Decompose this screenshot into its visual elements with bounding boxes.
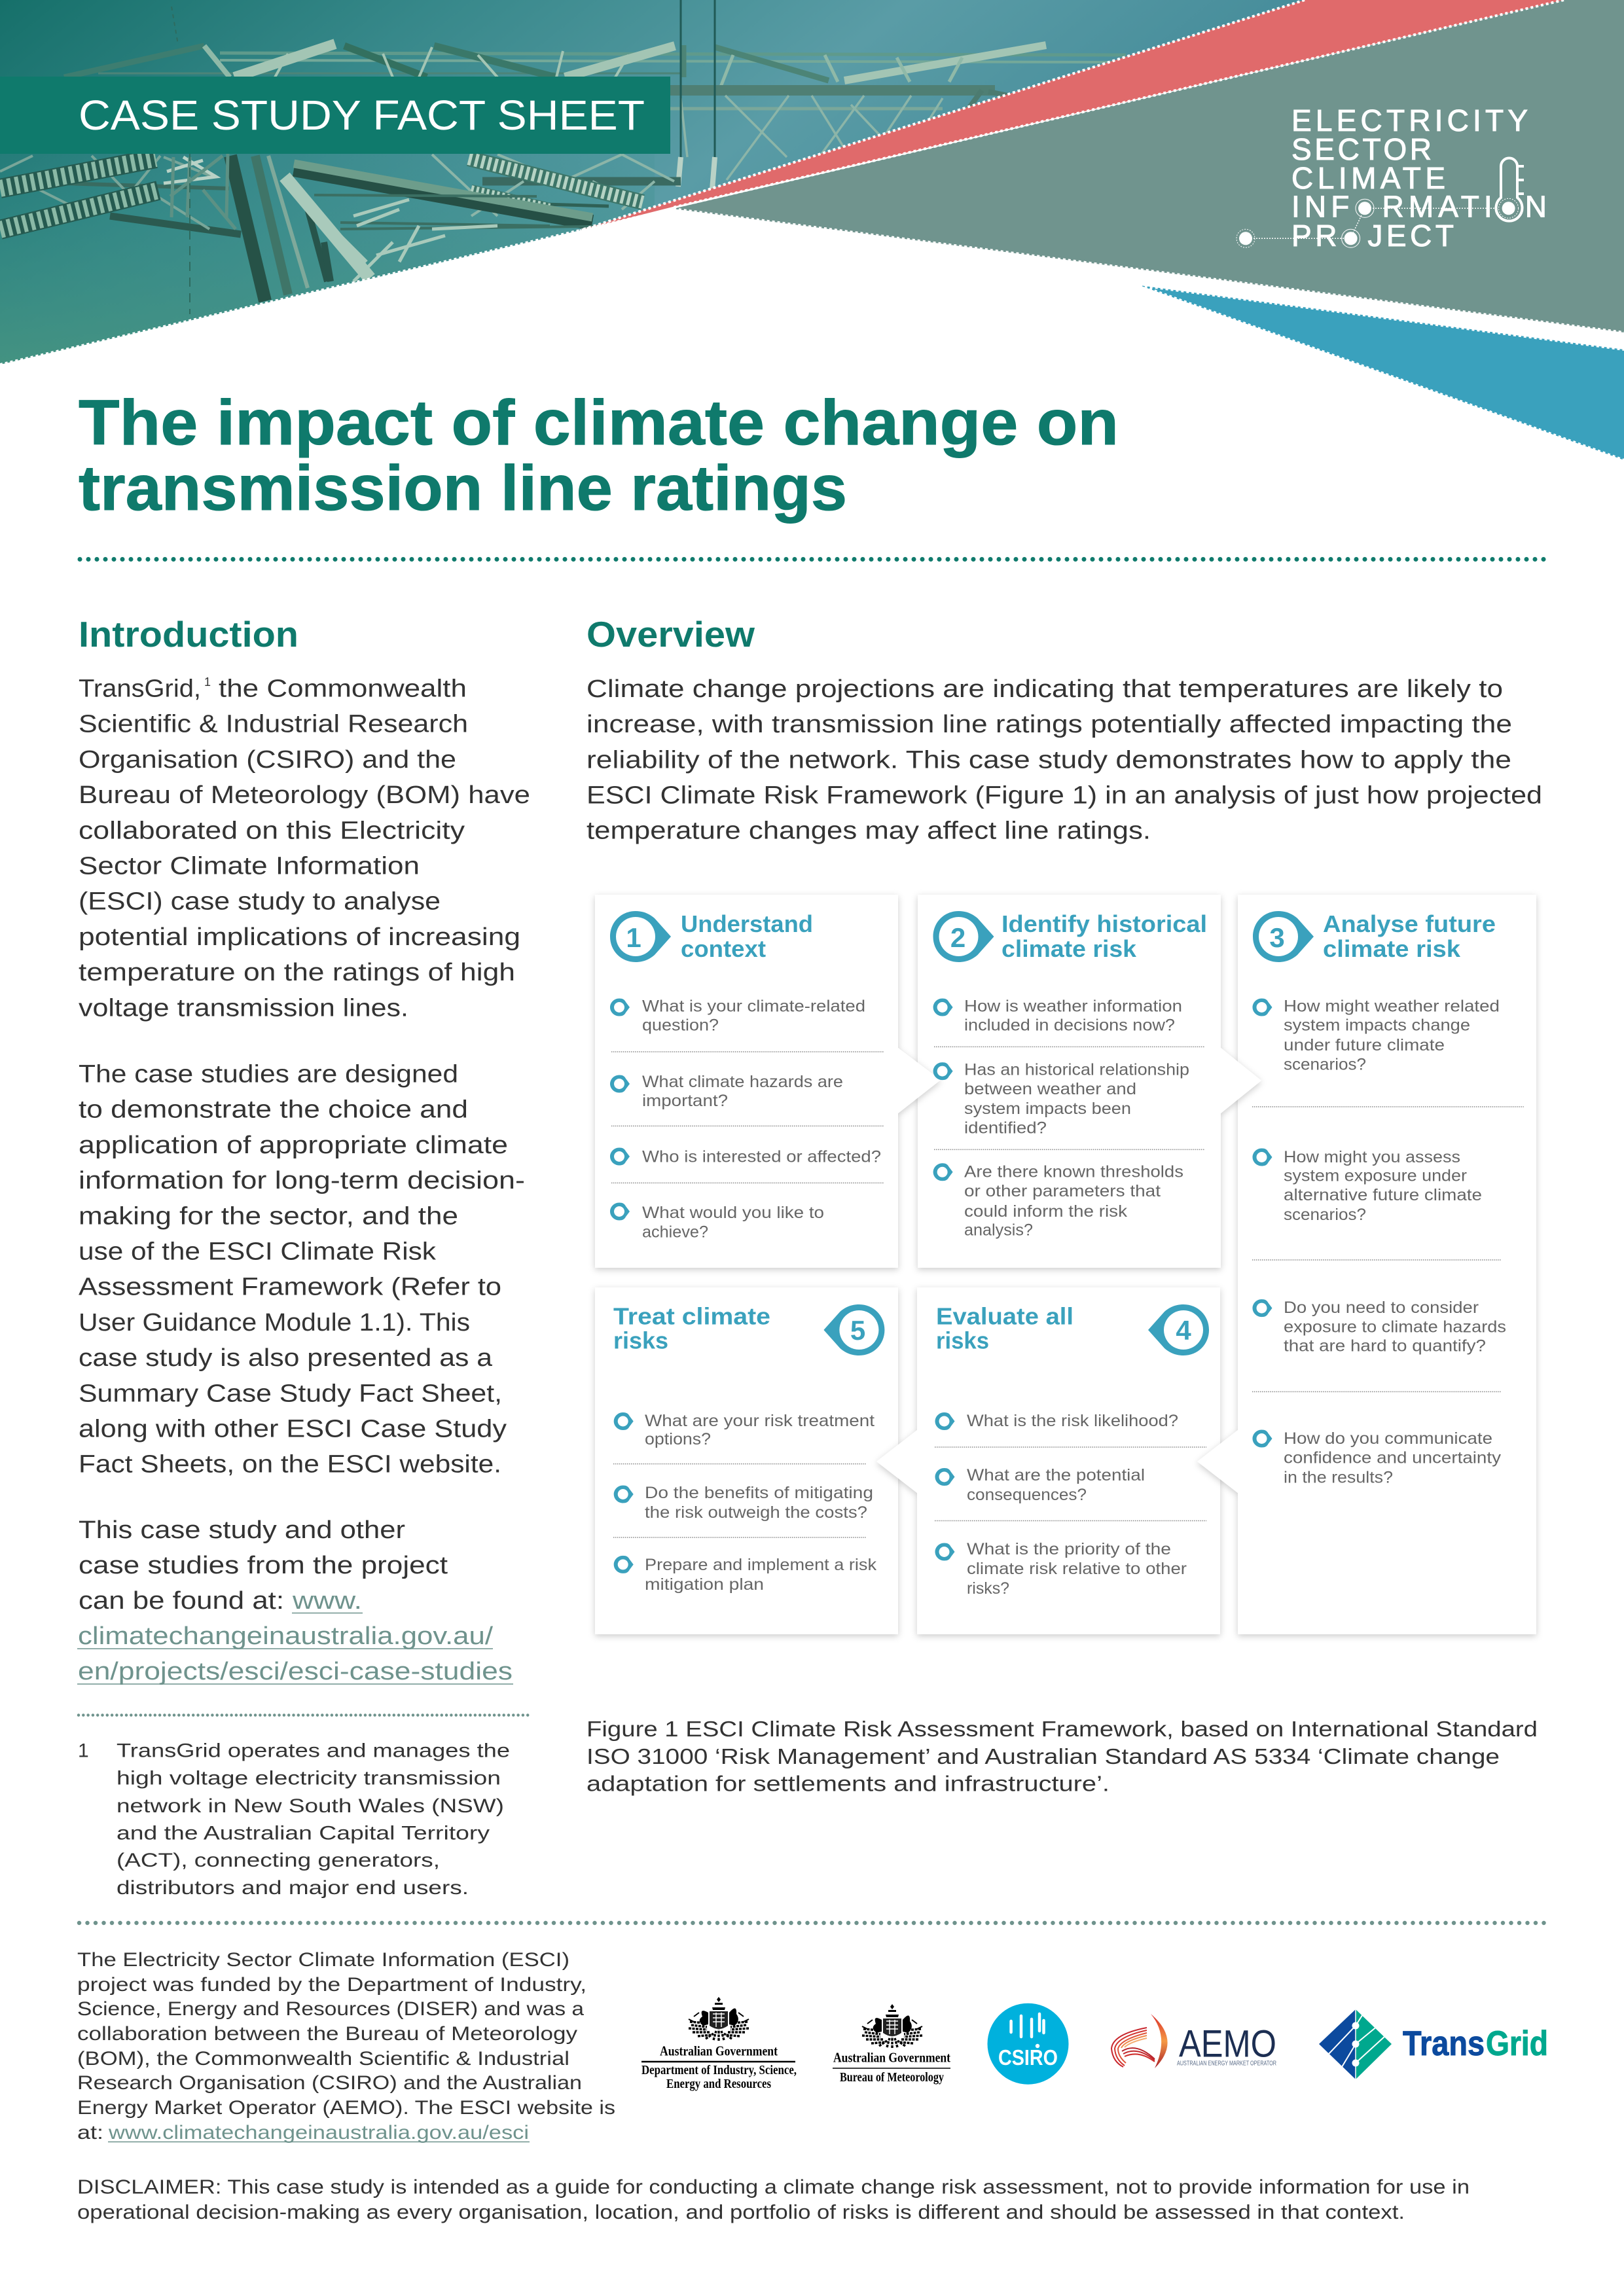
text block: introduction paragraph 1: potential implications of increasing [79, 924, 520, 951]
text block: introduction paragraph 3 with link: climatechangeinaustralia.gov.au/ [78, 1623, 493, 1650]
step 5: treat climate risks: mitigation plan [645, 1575, 764, 1594]
logo: Bureau of Meteorology: Australian Government [833, 2050, 950, 2066]
text block: introduction paragraph 1: (ESCI) case study to analyse [79, 888, 441, 916]
step 4: evaluate all risks: What is the priority of the [967, 1540, 1171, 1558]
step 2: identify historical climate risk: included in decisions now? [964, 1016, 1175, 1034]
truss chords [220, 53, 1126, 55]
step 2: identify historical climate risk: 2 [950, 922, 965, 953]
disclaimer: DISCLAIMER: This case study is intended as a guide for conducting a climate change risk assessment, not to provide information for use in [77, 2176, 1470, 2198]
step 3: analyse future climate risk [1252, 910, 1524, 1486]
text block: introduction paragraph 3 with link [77, 1516, 513, 1685]
step 2: identify historical climate risk: system impacts been [964, 1100, 1131, 1118]
text block: introduction paragraph 2: information for long-term decision- [79, 1167, 525, 1194]
logo: TransGrid [1319, 2004, 1548, 2079]
funding statement: at: [77, 2122, 103, 2144]
step 5: treat climate risks: Do the benefits of mitigating [645, 1484, 873, 1502]
text block: overview: Climate change projections are indicating that temperatures are likely to [586, 675, 1503, 703]
step 4: evaluate all risks: risks [936, 1327, 989, 1354]
step 5: treat climate risks: the risk outweigh the costs? [645, 1503, 867, 1522]
text block: introduction paragraph 3 with link: case studies from the project [79, 1552, 448, 1579]
step 5: treat climate risks: 5 [850, 1315, 865, 1346]
footnote: (ACT), connecting generators, [117, 1850, 440, 1871]
funding statement: www.climatechangeinaustralia.gov.au/esci [108, 2122, 529, 2144]
text block: overview: increase, with transmission line ratings potentially affected impacting the [586, 711, 1512, 738]
step 3: analyse future climate risk: Do you need to consider [1284, 1299, 1479, 1317]
text block: introduction paragraph 1: temperature on the ratings of high [79, 959, 515, 986]
text block: introduction paragraph 2: use of the ESCI Climate Risk [79, 1238, 437, 1266]
footnote [78, 1740, 510, 1899]
logo: TransGrid: Trans [1403, 2024, 1485, 2063]
step 1: understand context: question? [642, 1016, 719, 1034]
disclaimer [77, 2176, 1470, 2223]
text block: introduction paragraph 2 [79, 1060, 525, 1479]
step 3: analyse future climate risk: system impacts change [1284, 1016, 1470, 1034]
step 3: analyse future climate risk: scenarios? [1284, 1206, 1366, 1224]
figure caption: Figure 1 ESCI Climate Risk Assessment Framework, based on International Standard [586, 1717, 1538, 1742]
main beam and lattice at right [670, 85, 995, 96]
funding statement: (BOM), the Commonwealth Scientific & Industrial [77, 2048, 569, 2070]
header band: grey triangle [673, 0, 1624, 332]
step 1: understand context: context [681, 935, 766, 962]
text block: introduction paragraph 3 with link: www. [292, 1587, 362, 1615]
header band: blue triangle [1140, 285, 1624, 460]
text block: introduction paragraph 2: case study is also presented as a [79, 1344, 493, 1372]
step 1: understand context: 1 [626, 922, 641, 953]
title [79, 387, 1119, 524]
step 1: understand context: What would you like to [642, 1204, 824, 1222]
header photo: transmission tower [0, 0, 1309, 367]
step 3: analyse future climate risk: system exposure under [1284, 1167, 1467, 1185]
step 3: analyse future climate risk: How might weather related [1284, 997, 1500, 1016]
step 1: understand context: Understand [681, 910, 813, 937]
text block: introduction paragraph 2: Assessment Framework (Refer to [79, 1274, 501, 1301]
logo: AEMO: AUSTRALIAN ENERGY MARKET OPERATOR [1177, 2060, 1276, 2068]
funding statement: project was funded by the Department of Industry, [77, 1974, 586, 1996]
step 2: identify historical climate risk: How is weather information [964, 997, 1182, 1016]
step 4: evaluate all risks: climate risk relative to other [967, 1560, 1187, 1578]
text block: overview: reliability of the network. This case study demonstrates how to apply the [586, 746, 1511, 774]
step 2: identify historical climate risk: climate risk [1001, 935, 1137, 962]
step 1: understand context: What climate hazards are [642, 1073, 843, 1091]
logo: CSIRO: CSIRO [998, 2045, 1058, 2070]
text block: introduction paragraph 2: The case studies are designed [79, 1060, 458, 1088]
step 4: evaluate all risks: consequences? [967, 1486, 1087, 1504]
logo: Electricity Sector Climate Information Project: CLIMATE [1291, 161, 1445, 195]
step 3: analyse future climate risk: exposure to climate hazards [1284, 1318, 1506, 1336]
text block: introduction paragraph 2: making for the sector, and the [79, 1202, 458, 1230]
step 1: understand context: Who is interested or affected? [642, 1148, 881, 1166]
logo: Department of Industry, Science, Energy and Resources: Energy and Resources [666, 2077, 771, 2091]
figure caption: adaptation for settlements and infrastructure’. [586, 1772, 1110, 1797]
text block: introduction paragraph 2: Summary Case Study Fact Sheet, [79, 1380, 502, 1407]
step 3: analyse future climate risk: 3 [1269, 922, 1285, 953]
heading: introduction: Introduction [79, 614, 298, 655]
step 2: identify historical climate risk: Has an historical relationship [964, 1060, 1189, 1079]
step 3: analyse future climate risk: in the results? [1284, 1468, 1393, 1486]
funding statement: collaboration between the Bureau of Meteorology [77, 2023, 577, 2045]
title: The impact of climate change on [79, 387, 1119, 458]
columns and main members [230, 156, 265, 301]
step 4: evaluate all risks: risks? [967, 1579, 1009, 1598]
funding statement: Energy Market Operator (AEMO). The ESCI website is [77, 2097, 615, 2119]
footnote: TransGrid operates and manages the [117, 1740, 510, 1762]
step 3: analyse future climate risk: climate risk [1323, 935, 1461, 962]
disclaimer: operational decision-making as every organisation, location, and portfolio of risks is different and should be assessed in that context. [77, 2200, 1405, 2223]
logo: Bureau of Meteorology [833, 2004, 950, 2085]
text block: introduction paragraph 2: User Guidance Module 1.1). This [79, 1309, 470, 1336]
text block: introduction paragraph 2: along with other ESCI Case Study [79, 1415, 507, 1443]
funding statement: Research Organisation (CSIRO) and the Australian [77, 2072, 582, 2094]
text block: introduction paragraph 1: Bureau of Meteorology (BOM) have [79, 781, 530, 809]
title: transmission line ratings [79, 452, 847, 524]
figure caption: ISO 31000 ‘Risk Management’ and Australian Standard AS 5334 ‘Climate change [586, 1745, 1500, 1769]
footnote: distributors and major end users. [117, 1877, 469, 1899]
step 4: evaluate all risks [935, 1302, 1209, 1598]
text block: introduction paragraph 3 with link: en/projects/esci/esci-case-studies [78, 1658, 513, 1685]
step 1: understand context: important? [642, 1092, 728, 1110]
text block: introduction paragraph 1: Sector Climate Information [79, 852, 420, 880]
step 5: treat climate risks: Prepare and implement a risk [645, 1556, 877, 1574]
text block: overview [586, 675, 1542, 845]
footnote: network in New South Wales (NSW) [117, 1795, 504, 1817]
step 5: treat climate risks: options? [645, 1430, 711, 1448]
funding statement [77, 1949, 615, 2144]
step 4: evaluate all risks: Evaluate all [936, 1302, 1074, 1329]
label band: case study fact sheet [0, 77, 670, 154]
funding statement: The Electricity Sector Climate Information (ESCI) [77, 1949, 569, 1971]
step 1: understand context: What is your climate-related [642, 997, 865, 1016]
label band: case study fact sheet: CASE STUDY FACT SHEET [79, 92, 645, 139]
step 3: analyse future climate risk: under future climate [1284, 1036, 1445, 1054]
logo: Department of Industry, Science, Energy and Resources: Department of Industry, Science, [641, 2063, 797, 2077]
step 1: understand context [610, 910, 884, 1241]
step 5: treat climate risks: risks [613, 1327, 668, 1354]
text block: introduction paragraph 3 with link: This case study and other [79, 1516, 405, 1544]
logo: AEMO: AEMO [1179, 2023, 1276, 2066]
logo: Electricity Sector Climate Information Project: PROJECT [1291, 219, 1454, 253]
figure caption [586, 1717, 1538, 1797]
step 2: identify historical climate risk: or other parameters that [964, 1182, 1161, 1200]
heading: overview: Overview [586, 614, 755, 655]
text block: introduction paragraph 1: 1 [204, 675, 211, 689]
logo: Electricity Sector Climate Information Project: ELECTRICITY [1291, 103, 1528, 137]
logo: Department of Industry, Science, Energy and Resources [641, 1997, 797, 2091]
text block: introduction paragraph 1 [79, 675, 530, 1022]
step 2: identify historical climate risk: analysis? [964, 1221, 1033, 1240]
logo: Electricity Sector Climate Information Project: SECTOR [1291, 132, 1432, 166]
step 4: evaluate all risks: 4 [1176, 1315, 1191, 1346]
step 3: analyse future climate risk: Analyse future [1323, 910, 1496, 937]
step 2: identify historical climate risk: Identify historical [1001, 910, 1207, 937]
step 3: analyse future climate risk: How might you assess [1284, 1148, 1460, 1166]
footnote: high voltage electricity transmission [117, 1768, 501, 1789]
step 5: treat climate risks: What are your risk treatment [645, 1412, 875, 1430]
logo: AEMO [1111, 2014, 1276, 2068]
step 2: identify historical climate risk: Are there known thresholds [964, 1163, 1183, 1181]
text block: introduction paragraph 1: Organisation (CSIRO) and the [79, 746, 456, 774]
text block: introduction paragraph 1: TransGrid, [79, 675, 201, 703]
text block: overview: temperature changes may affect line ratings. [586, 817, 1151, 845]
horizontal chords below the label band [482, 177, 681, 186]
logo: TransGrid: Grid [1486, 2024, 1548, 2063]
step 2: identify historical climate risk: identified? [964, 1119, 1047, 1138]
logo: Electricity Sector Climate Information Project: INFORMATION [1291, 190, 1547, 224]
step 3: analyse future climate risk: How do you communicate [1284, 1429, 1492, 1448]
logo: Bureau of Meteorology: Bureau of Meteorology [840, 2070, 944, 2085]
insulators [0, 158, 158, 230]
lattice [432, 154, 674, 216]
footnote: and the Australian Capital Territory [117, 1822, 490, 1844]
text block: introduction paragraph 1: Scientific & Industrial Research [79, 711, 468, 738]
text block: introduction paragraph 1: voltage transmission lines. [79, 994, 408, 1022]
step 5: treat climate risks [613, 1302, 884, 1594]
step 3: analyse future climate risk: confidence and uncertainty [1284, 1448, 1502, 1467]
figure 1: ESCI climate risk framework [595, 895, 1536, 1634]
step 2: identify historical climate risk: between weather and [964, 1080, 1136, 1098]
step 3: analyse future climate risk: scenarios? [1284, 1056, 1366, 1074]
step 3: analyse future climate risk: alternative future climate [1284, 1186, 1482, 1204]
text block: introduction paragraph 1: collaborated on this Electricity [79, 817, 465, 844]
text block: introduction paragraph 1: the Commonwealth [219, 675, 467, 703]
step 4: evaluate all risks: What are the potential [967, 1466, 1145, 1484]
text block: introduction paragraph 2: Fact Sheets, on the ESCI website. [79, 1451, 501, 1479]
text block: introduction paragraph 2: to demonstrate the choice and [79, 1096, 468, 1124]
text block: introduction paragraph 2: application of appropriate climate [79, 1132, 508, 1159]
step 2: identify historical climate risk: could inform the risk [964, 1202, 1128, 1221]
logo: CSIRO [987, 2003, 1068, 2085]
step 5: treat climate risks: Treat climate [613, 1302, 770, 1329]
footnote: 1 [78, 1740, 89, 1762]
logo: Electricity Sector Climate Information Project [1236, 103, 1547, 253]
step 2: identify historical climate risk [933, 910, 1207, 1240]
step 3: analyse future climate risk: that are hard to quantify? [1284, 1336, 1486, 1355]
text block: overview: ESCI Climate Risk Framework (Figure 1) in an analysis of just how projected [586, 781, 1542, 809]
funding statement: Science, Energy and Resources (DISER) and was a [77, 1998, 584, 2020]
header band: red stripe [580, 0, 1564, 230]
text block: introduction paragraph 3 with link: can be found at: [79, 1587, 284, 1615]
logo: Department of Industry, Science, Energy and Resources: Australian Government [660, 2043, 778, 2059]
step 4: evaluate all risks: What is the risk likelihood? [967, 1412, 1178, 1430]
step 1: understand context: achieve? [642, 1223, 708, 1241]
